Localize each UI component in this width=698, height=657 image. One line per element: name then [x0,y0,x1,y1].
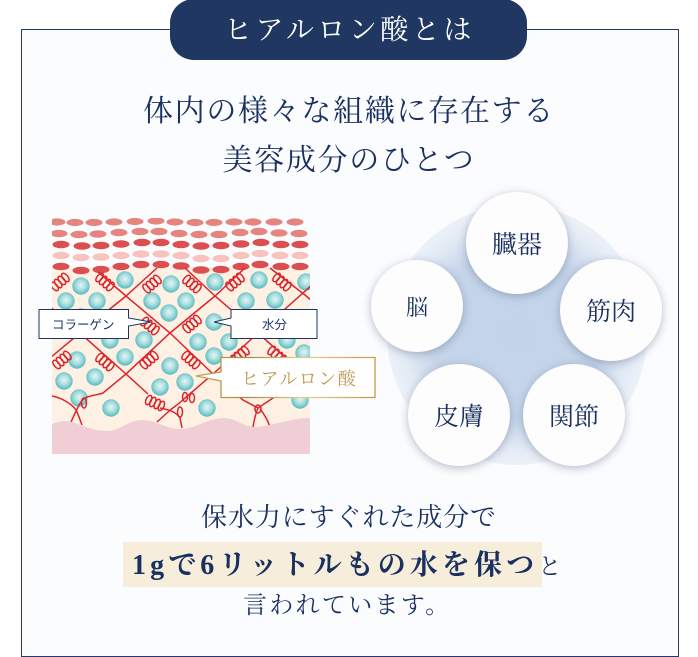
skin cells [48,217,308,274]
central blue glow [387,205,647,465]
heading pill [170,0,527,60]
hyaluronic acid label box [196,358,375,398]
collagen fibres [48,268,312,428]
circle: skin: 皮膚 [434,404,484,431]
heading pill: ヒアルロン酸とは [224,15,475,46]
title text: 体内の様々な組織に存在する [143,95,555,128]
skin diagram [38,218,376,454]
circle: joints [523,364,625,466]
circle: brain [371,260,463,352]
circle: muscle [560,259,662,361]
title text [143,95,555,177]
collagen coils [49,272,293,412]
closing line 1: 保水力にすぐれた成分で [201,503,497,532]
water molecules [55,271,315,417]
collagen label box [39,310,151,338]
highlight band [123,542,542,587]
circle: skin [408,364,510,466]
diagram illustration [48,217,315,454]
circle: organs: 臓器 [492,232,542,259]
closing line 2 with emphasis: 1gで6リットルもの水を保つと [132,550,561,581]
water label box: 水分 [262,318,288,332]
closing line 3: 言われています。 [243,593,451,619]
circle: organs [466,192,568,294]
water label box [214,310,317,338]
circle: muscle: 筋肉 [586,299,636,326]
circle: brain: 脳 [406,294,428,320]
hyaluronic acid label box: ヒアルロン酸 [241,369,357,389]
dermis layer [52,418,310,454]
title text: 美容成分のひとつ [222,144,476,177]
collagen label box: コラーゲン [52,318,115,332]
circle: joints: 関節 [549,404,599,431]
